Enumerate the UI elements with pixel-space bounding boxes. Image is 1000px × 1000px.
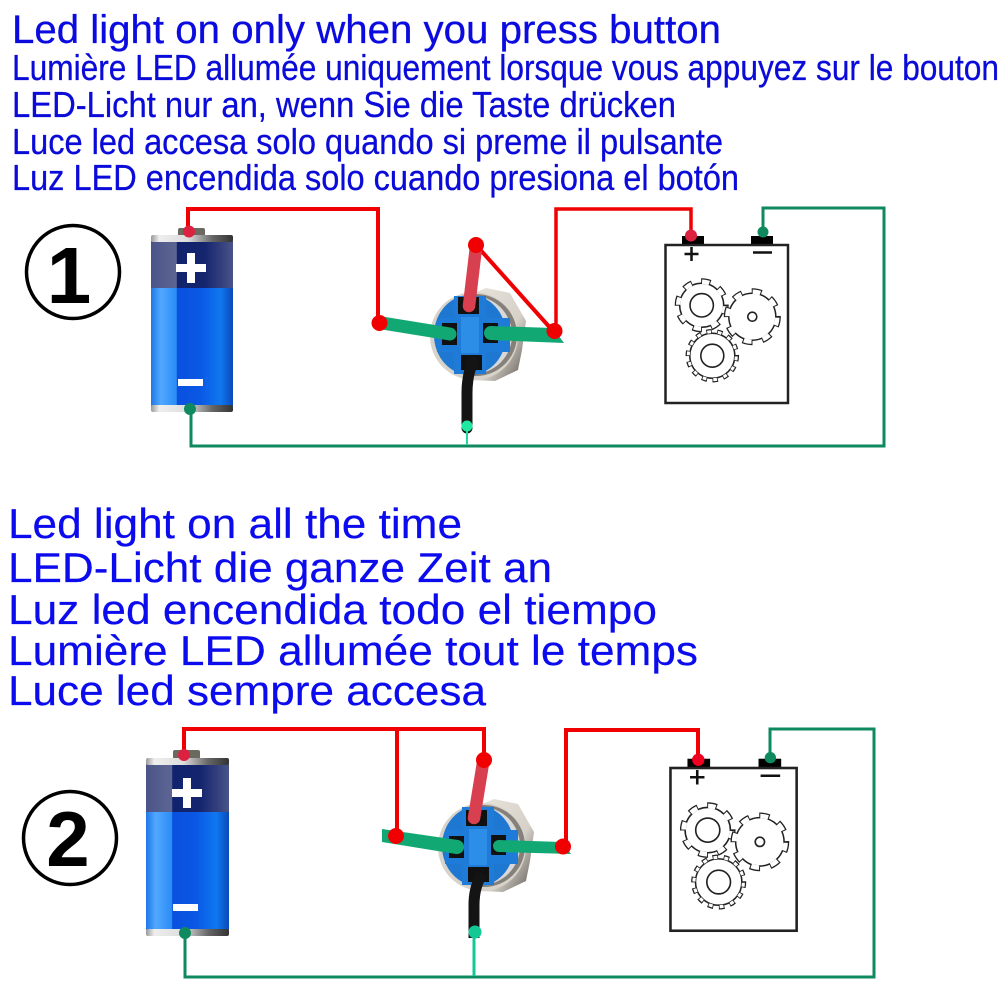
junction dot: black wire bbox=[468, 926, 482, 938]
negative terminal dot bbox=[179, 927, 191, 939]
left green wire bbox=[382, 829, 464, 854]
text: Spanish: Luz led encendida todo el tiempo bbox=[8, 586, 657, 633]
positive terminal dot bbox=[183, 226, 195, 238]
load plus bbox=[684, 247, 698, 261]
gear 3 bbox=[688, 332, 736, 380]
load box 2 with gears bbox=[670, 752, 797, 931]
black wire bbox=[474, 874, 482, 938]
load minus bbox=[761, 774, 780, 777]
text: German: LED-Licht die ganze Zeit an bbox=[8, 544, 552, 591]
text: Spanish: Luz LED encendida solo cuando presiona el botón bbox=[12, 157, 739, 198]
load box 1 with gears bbox=[666, 226, 788, 403]
gear 3 bbox=[694, 857, 743, 907]
positive terminal dot bbox=[178, 749, 190, 761]
gear 1 bbox=[678, 282, 725, 329]
title block: scenario 1 bbox=[12, 8, 999, 198]
black wire bbox=[467, 362, 473, 428]
gear 2 bbox=[734, 816, 786, 868]
left green wire bbox=[382, 323, 450, 334]
number badge 2 bbox=[24, 792, 116, 884]
load negative dot bbox=[765, 752, 776, 763]
red wire bbox=[469, 247, 476, 306]
battery 2 bbox=[146, 749, 229, 939]
junction dot: right bbox=[546, 323, 562, 339]
right green wire bbox=[484, 326, 564, 343]
text: Italian: Luce led accesa solo quando si preme il pulsante bbox=[12, 121, 723, 162]
wiring diagram 2 wires bbox=[184, 729, 874, 977]
number badge 1 bbox=[26, 226, 120, 320]
right green wire bbox=[493, 840, 571, 854]
junction dot: top bbox=[476, 752, 492, 768]
heading: English: Led light on only when you press button bbox=[12, 8, 721, 52]
icon: minus sign bbox=[178, 379, 203, 386]
push-button switch 2 bbox=[382, 752, 571, 976]
junction dot: left bbox=[372, 315, 388, 331]
junction dot: left bbox=[388, 828, 404, 844]
icon: plus sign bbox=[176, 253, 206, 283]
stem bbox=[472, 932, 476, 976]
gear 1 bbox=[684, 806, 732, 854]
junction dot: top bbox=[468, 237, 484, 253]
icon: plus sign bbox=[172, 778, 202, 808]
load plus bbox=[690, 770, 704, 784]
title block: scenario 2 bbox=[8, 500, 698, 714]
number badge 2: 2 bbox=[46, 795, 90, 883]
heading: English: Led light on all the time bbox=[8, 500, 462, 547]
red wire bbox=[474, 763, 483, 818]
negative terminal dot bbox=[184, 403, 196, 415]
text: Italian: Luce led sempre accesa bbox=[8, 667, 487, 714]
text: French: Lumière LED allumée tout le temps bbox=[8, 627, 698, 674]
load negative dot bbox=[758, 226, 768, 238]
battery 1 bbox=[151, 226, 233, 415]
push-button switch 1 bbox=[372, 237, 564, 445]
stem bbox=[466, 426, 468, 445]
load positive dot bbox=[692, 754, 704, 766]
text: German: LED-Licht nur an, wenn Sie die Taste drücken bbox=[12, 84, 676, 125]
load positive dot bbox=[685, 230, 697, 242]
icon: minus sign bbox=[173, 904, 198, 911]
junction dot: black wire bbox=[462, 420, 472, 432]
junction dot: right bbox=[555, 838, 571, 854]
wiring diagram 1 wires bbox=[188, 208, 884, 446]
number badge 1: 1 bbox=[47, 231, 91, 320]
load minus bbox=[753, 251, 772, 254]
gear 2 bbox=[727, 292, 777, 342]
